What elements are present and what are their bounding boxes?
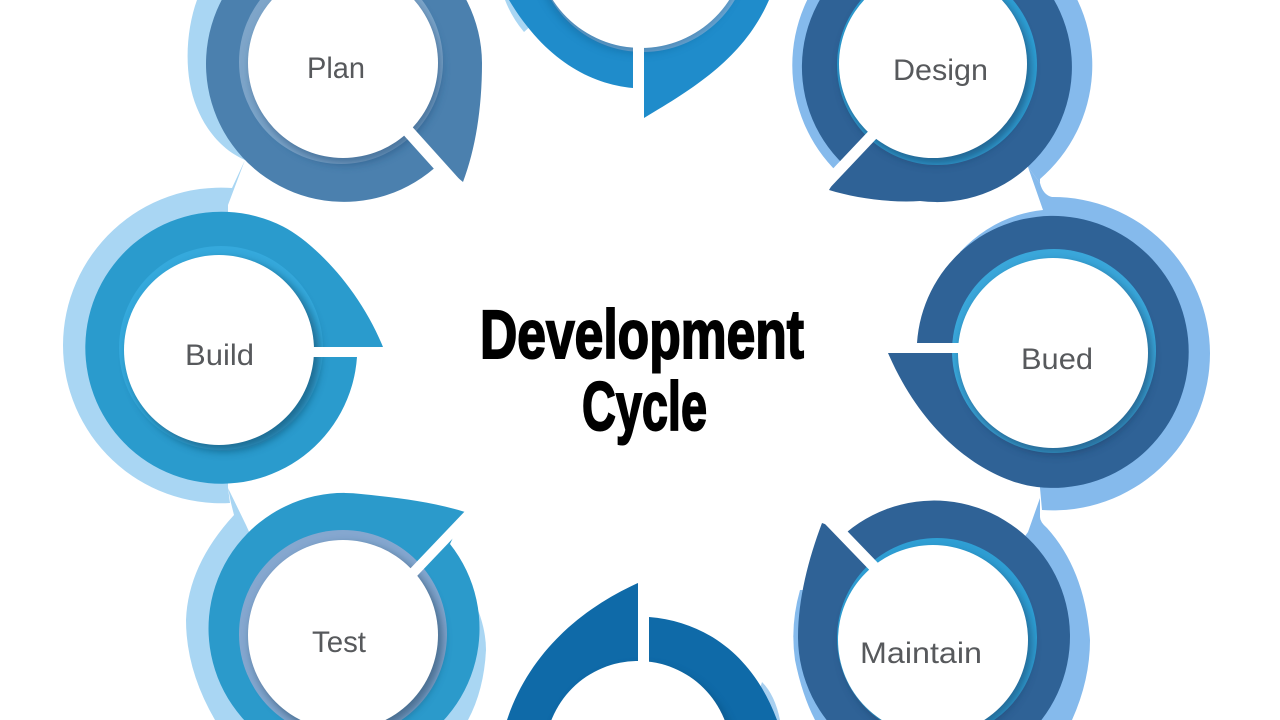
node: Test	[186, 488, 486, 720]
label: Maintain: Maintain	[860, 637, 982, 670]
light outer ring: Plan	[188, 0, 245, 160]
inner ring: Plan	[239, 0, 443, 164]
white disc: Build	[124, 255, 314, 445]
white disc: Design	[839, 0, 1027, 158]
segmented ring: Build	[85, 212, 383, 484]
inner ring: top	[536, 0, 750, 52]
light sliver: bottom ring	[750, 682, 780, 720]
segmented ring: top	[509, 0, 769, 118]
white disc: Bued	[958, 258, 1148, 448]
light sliver: Test	[444, 610, 486, 720]
segmented ring: Design	[802, 0, 1072, 202]
segmented ring: Bued	[888, 216, 1189, 488]
inner ring: Bued	[952, 249, 1156, 453]
segmented ring: Maintain	[798, 501, 1070, 720]
white disc: top	[536, 0, 746, 48]
node: Design	[792, 0, 1092, 202]
inner ring: Test	[239, 530, 447, 720]
light outer ring: Maintain	[1025, 498, 1090, 720]
white disc: Test	[248, 540, 438, 720]
segmented ring: bottom	[507, 583, 777, 720]
light outer ring: Bued	[960, 167, 1210, 510]
white disc: Plan	[248, 0, 438, 158]
node: Build	[63, 160, 395, 503]
label: Bued: Bued	[1021, 343, 1093, 376]
inner ring: Maintain	[837, 538, 1037, 720]
light outer ring: Design	[792, 0, 1092, 183]
light outer ring: Build	[63, 160, 245, 503]
title line: Cycle: Cycle	[582, 368, 707, 445]
inner ring: Design	[837, 0, 1037, 165]
white disc: bottom	[545, 661, 731, 720]
label: Build: Build	[185, 339, 254, 372]
inner ring: Build	[119, 246, 323, 450]
node: Maintain	[793, 498, 1090, 720]
segmented ring: Test	[209, 493, 480, 720]
segmented ring: Plan	[206, 0, 482, 202]
title	[480, 296, 804, 445]
node: Plan	[188, 0, 482, 202]
light sliver: Maintain	[793, 590, 826, 720]
title line: Development: Development	[480, 296, 804, 373]
node: bottom partial ring	[507, 583, 780, 720]
light outer ring: Test	[186, 488, 249, 720]
label: Design: Design	[893, 54, 988, 87]
node: top partial ring	[505, 0, 769, 125]
label: Test: Test	[312, 626, 367, 659]
node: Bued	[880, 167, 1210, 510]
white disc: Maintain	[838, 545, 1028, 720]
label: Plan: Plan	[307, 52, 365, 85]
light sliver: top ring	[505, 0, 528, 32]
